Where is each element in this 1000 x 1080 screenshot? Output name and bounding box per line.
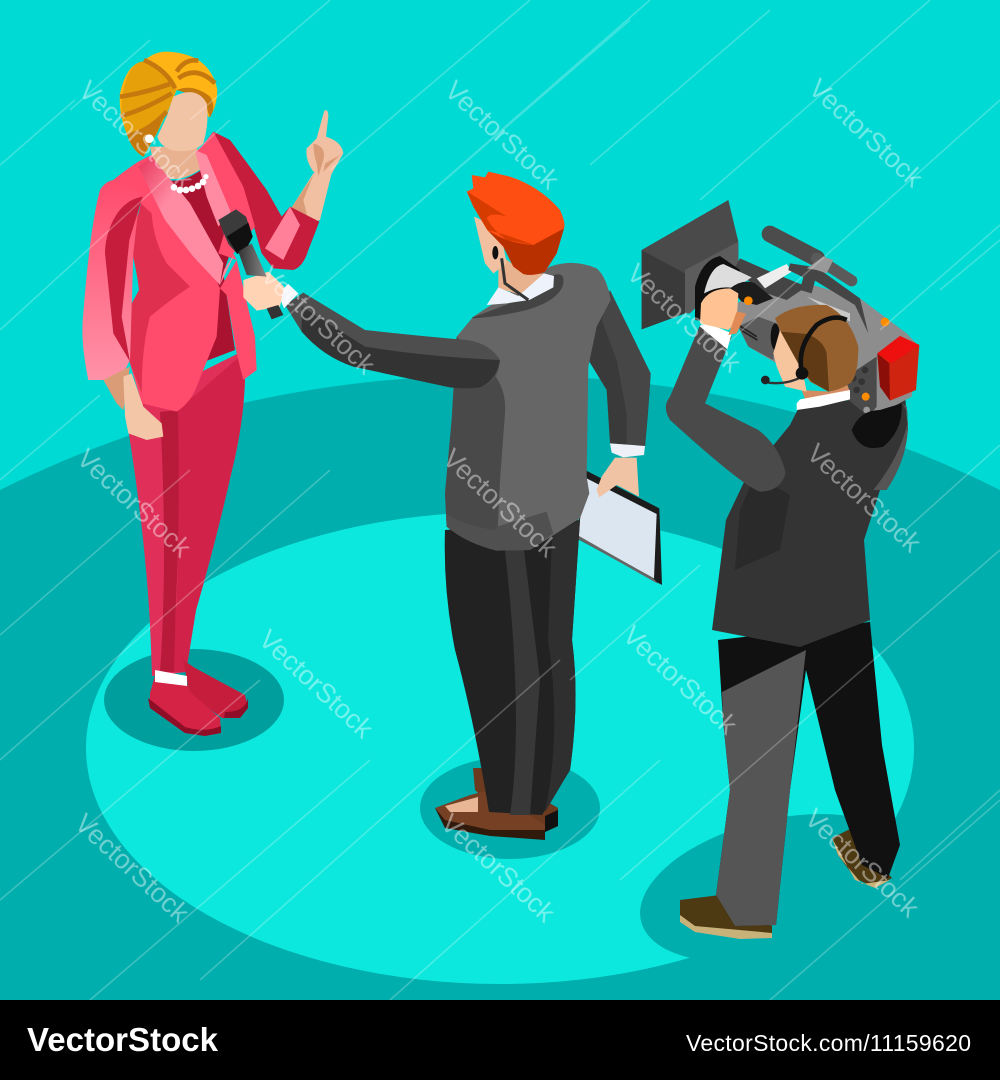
shadow: woman	[104, 649, 284, 751]
hair	[467, 172, 564, 275]
jacket shade	[445, 337, 505, 551]
lens	[695, 256, 740, 323]
cameraman: shoes	[680, 829, 892, 939]
tube and handle	[757, 264, 792, 288]
woman: trousers	[125, 350, 245, 676]
tablet	[577, 470, 662, 585]
shadow: reporter	[420, 757, 600, 859]
hair	[120, 52, 217, 157]
microphone	[218, 209, 283, 319]
hair	[775, 305, 858, 392]
eyepiece	[771, 323, 780, 350]
watermarks	[69, 73, 929, 928]
lower hand	[597, 458, 639, 497]
floor circle	[86, 512, 914, 984]
cameraman	[642, 200, 919, 939]
neck	[498, 253, 544, 297]
shirt collar	[487, 273, 554, 305]
red battery	[877, 336, 919, 401]
raised arm	[666, 325, 786, 492]
face side	[474, 217, 507, 273]
raised hand	[306, 110, 343, 177]
watermarks: VectorStock	[253, 624, 379, 744]
reporter	[218, 172, 662, 840]
far sleeve	[213, 132, 319, 270]
reporter: trousers	[445, 520, 580, 815]
watermarks: VectorStock	[439, 75, 565, 195]
extended arm	[285, 293, 500, 388]
watermarks: VectorStock	[69, 808, 195, 928]
neck	[150, 147, 202, 179]
cuff	[610, 443, 645, 457]
footer logo text: VectorStock	[27, 1021, 219, 1058]
watermarks: VectorStock	[255, 260, 381, 380]
pearl necklace	[171, 174, 209, 193]
far arm	[588, 277, 651, 447]
cameraman: head and arm	[666, 288, 908, 492]
lower near arm	[103, 367, 130, 410]
watermarks: VectorStock	[803, 73, 929, 193]
face	[773, 330, 807, 392]
shoulder pad	[852, 403, 902, 448]
watermarks: VectorStock	[801, 438, 927, 558]
footer bar	[0, 1000, 1000, 1080]
watermarks: VectorStock	[799, 803, 925, 923]
headset	[761, 318, 847, 384]
cuff	[278, 284, 298, 308]
jacket	[196, 132, 257, 380]
face	[157, 92, 207, 151]
lower hand	[123, 373, 163, 440]
near sleeve	[82, 180, 140, 380]
woman: upper body	[82, 52, 343, 440]
hand on camera	[700, 288, 738, 330]
collar	[797, 390, 850, 410]
watermarks: VectorStock	[621, 258, 747, 378]
watermarks: VectorStock	[73, 75, 199, 195]
camera body	[737, 283, 919, 417]
jacket back	[445, 263, 611, 551]
hand with mic	[243, 272, 284, 311]
footer url text: VectorStock.com/11159620	[686, 1030, 971, 1056]
neck	[802, 383, 850, 403]
shotgun microphone	[770, 234, 852, 281]
floor ring	[0, 375, 1000, 1000]
waist gap	[121, 244, 139, 321]
reporter: upper body	[243, 172, 651, 551]
watermarks: VectorStock	[437, 443, 563, 563]
watermarks: VectorStock	[71, 443, 197, 563]
camera	[642, 200, 919, 417]
raised forearm	[290, 153, 337, 227]
earring	[145, 134, 154, 143]
woman: shoes	[148, 660, 248, 736]
woman	[82, 52, 343, 736]
earpiece	[492, 246, 528, 300]
cameraman: trousers	[716, 622, 900, 926]
lapel	[138, 157, 223, 285]
cuff	[699, 323, 732, 349]
cameraman: jacket	[712, 395, 908, 647]
indicator lights	[744, 296, 889, 401]
jacket collar	[472, 274, 564, 318]
shadow: cameraman	[640, 814, 851, 958]
matte box	[642, 200, 738, 329]
reporter: shoes	[435, 768, 558, 840]
watermarks: VectorStock	[435, 808, 561, 928]
watermarks: VectorStock	[617, 620, 743, 740]
top	[167, 168, 235, 363]
